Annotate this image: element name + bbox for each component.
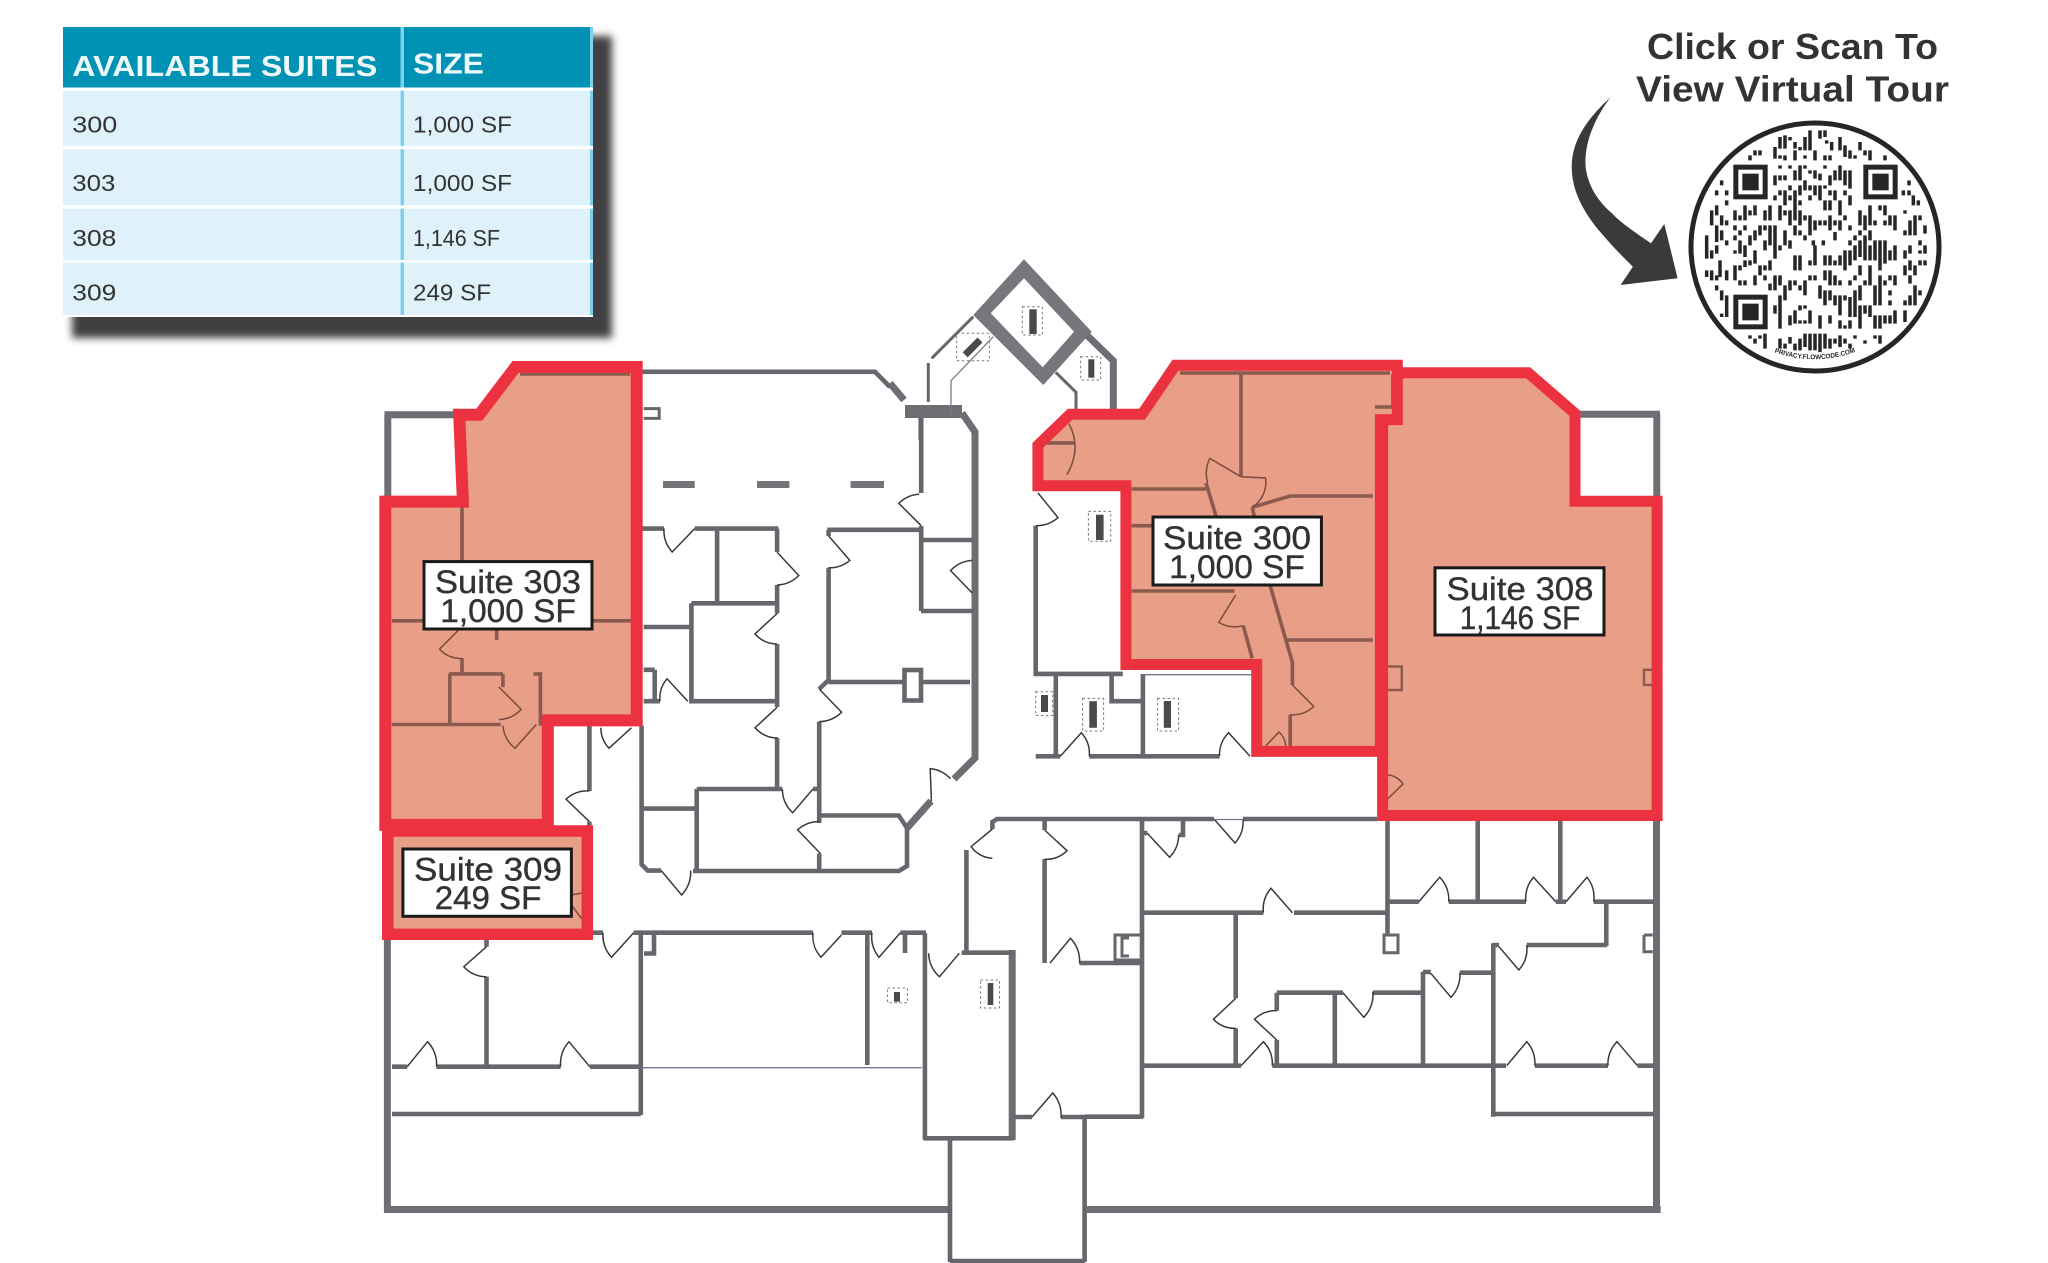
label: suite 300 bbox=[1153, 517, 1321, 585]
virtual tour heading: View Virtual Tour bbox=[1636, 69, 1949, 110]
suite 308 fill bbox=[1383, 373, 1657, 816]
suite 308 door bbox=[1388, 775, 1403, 799]
label: suite 308 bbox=[1435, 568, 1604, 636]
label: suite 303: Suite 303 bbox=[435, 564, 581, 600]
label: suite 303: 1,000 SF bbox=[440, 593, 576, 629]
table row: suite 300 bbox=[63, 91, 593, 146]
label: suite 308: Suite 308 bbox=[1446, 571, 1594, 607]
label: suite 308: 1,146 SF bbox=[1460, 600, 1580, 636]
label: suite 309 bbox=[403, 849, 571, 916]
virtual tour heading bbox=[1636, 26, 1949, 110]
suite 303 fill bbox=[385, 367, 637, 825]
suite 300 doors bbox=[1067, 424, 1314, 746]
suite 300 fill bbox=[1038, 365, 1397, 751]
interior walls bbox=[392, 372, 1654, 1262]
table background bbox=[63, 27, 593, 317]
table header row bbox=[63, 27, 593, 88]
QR code bbox=[1688, 120, 1942, 374]
table row: suite 303 bbox=[63, 149, 593, 205]
QR circle border bbox=[1691, 123, 1939, 371]
top core diamond bbox=[905, 259, 1113, 418]
suite 300 outline bbox=[1038, 365, 1397, 751]
table row: suite 309: 309 bbox=[72, 280, 116, 306]
icon: curved arrow pointing to QR code bbox=[1572, 97, 1678, 285]
suite 308 interior details bbox=[1388, 666, 1653, 690]
table row: suite 308: 1,146 SF bbox=[413, 225, 500, 251]
suite 303 doors bbox=[440, 631, 536, 748]
table row: suite 308 bbox=[63, 209, 593, 260]
suite 308 bbox=[1383, 373, 1657, 816]
suite 308 outline bbox=[1383, 373, 1657, 816]
suite 303 interior walls bbox=[392, 374, 631, 726]
QR data modules bbox=[1707, 130, 1925, 352]
table row: suite 309: 249 SF bbox=[413, 280, 491, 306]
QR privacy URL: PRIVACY.FLOWCODE.COM bbox=[1774, 348, 1855, 360]
suite 309 bbox=[388, 831, 587, 934]
QR finder patterns bbox=[1736, 167, 1895, 327]
label: suite 309: Suite 309 bbox=[414, 852, 562, 888]
floor dashes bbox=[663, 481, 884, 488]
suite 309 outline bbox=[388, 831, 587, 934]
table row: suite 309 bbox=[63, 263, 593, 315]
elevators and stair cores bbox=[888, 307, 1179, 1008]
table row: suite 303: 303 bbox=[72, 170, 115, 196]
floor plan bbox=[384, 259, 1661, 1262]
table drop shadow bbox=[72, 36, 612, 338]
suite 303 outline bbox=[385, 367, 637, 825]
table row: suite 303: 1,000 SF bbox=[413, 170, 512, 196]
table header row: AVAILABLE SUITES bbox=[72, 51, 377, 83]
label: suite 300: Suite 300 bbox=[1163, 520, 1311, 556]
table: available suites bbox=[63, 27, 612, 338]
table row: suite 300: 300 bbox=[72, 111, 117, 137]
suite 303 bbox=[385, 367, 637, 825]
suite 309 fill bbox=[388, 831, 587, 934]
table row: suite 300: 1,000 SF bbox=[413, 111, 512, 137]
thin structural lines bbox=[641, 675, 1254, 1068]
exterior walls bbox=[384, 383, 1661, 1212]
suite 300 interior walls bbox=[1045, 373, 1393, 746]
virtual tour heading: Click or Scan To bbox=[1647, 26, 1938, 67]
label: suite 303 bbox=[424, 562, 592, 629]
table row: suite 308: 308 bbox=[72, 225, 116, 251]
small closets and shafts bbox=[644, 409, 1653, 962]
suite 300 bbox=[1038, 365, 1397, 751]
shaft block on interior wall bbox=[904, 670, 921, 700]
table header row: SIZE bbox=[413, 48, 484, 80]
label: suite 300: 1,000 SF bbox=[1169, 549, 1305, 585]
suite 309 door bbox=[571, 893, 582, 920]
door swings bbox=[407, 493, 1638, 1118]
label: suite 309: 249 SF bbox=[435, 880, 541, 916]
